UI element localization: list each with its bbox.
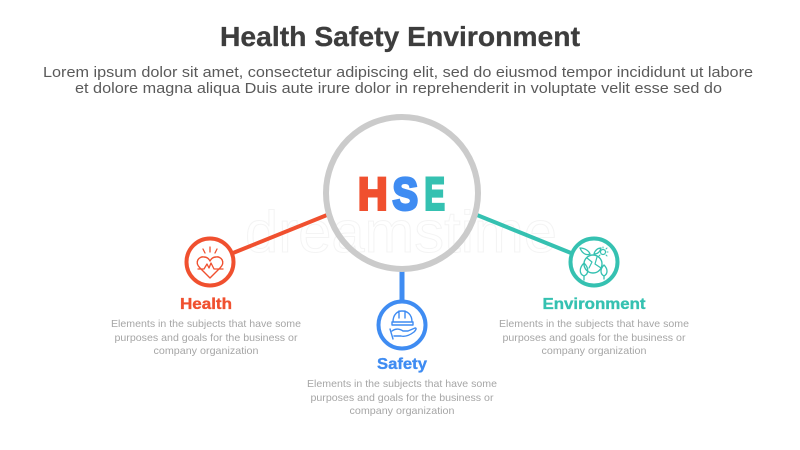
description: environment: purposes and goals for the business or bbox=[502, 332, 686, 344]
icon: helmet and hand bbox=[378, 302, 426, 348]
heading: safety: Safety bbox=[377, 356, 427, 373]
description: health: Elements in the subjects that have some bbox=[111, 318, 301, 330]
description: safety: company organization bbox=[350, 405, 455, 417]
HSE letters: E bbox=[424, 170, 445, 220]
subtitle text: Lorem ipsum dolor sit amet, consectetur adipiscing elit, sed do eiusmod tempor incididunt ut labore bbox=[43, 64, 753, 81]
description: environment: company organization bbox=[542, 345, 647, 357]
description: environment bbox=[499, 318, 689, 357]
heading: environment: Environment bbox=[542, 296, 646, 313]
panel: environment bbox=[499, 238, 689, 357]
description: health: company organization bbox=[154, 345, 259, 357]
description: health bbox=[111, 318, 301, 357]
connector: environment bbox=[477, 215, 571, 253]
HSE letters bbox=[358, 168, 445, 220]
panel: safety bbox=[307, 302, 497, 417]
subtitle text bbox=[43, 64, 753, 97]
description: safety bbox=[307, 378, 497, 417]
description: safety: purposes and goals for the business or bbox=[310, 392, 494, 404]
title: Health Safety Environment bbox=[220, 21, 580, 52]
connector: health bbox=[233, 215, 327, 253]
HSE letters: S bbox=[392, 168, 418, 219]
watermark: dreamstime bbox=[245, 200, 557, 265]
description: environment: Elements in the subjects that have some bbox=[499, 318, 689, 330]
connector: safety bbox=[400, 271, 404, 300]
HSE letters: H bbox=[358, 170, 388, 220]
heading: health: Health bbox=[180, 296, 232, 313]
description: health: purposes and goals for the business or bbox=[114, 332, 298, 344]
icon: heart bbox=[186, 238, 234, 286]
panel: health bbox=[111, 238, 301, 357]
icon: globe with leaves bbox=[570, 238, 618, 286]
subtitle text: et dolore magna aliqua Duis aute irure dolor in reprehenderit in voluptate velit esse sed do bbox=[75, 80, 722, 97]
description: safety: Elements in the subjects that have some bbox=[307, 378, 497, 390]
central circle bbox=[326, 117, 478, 269]
